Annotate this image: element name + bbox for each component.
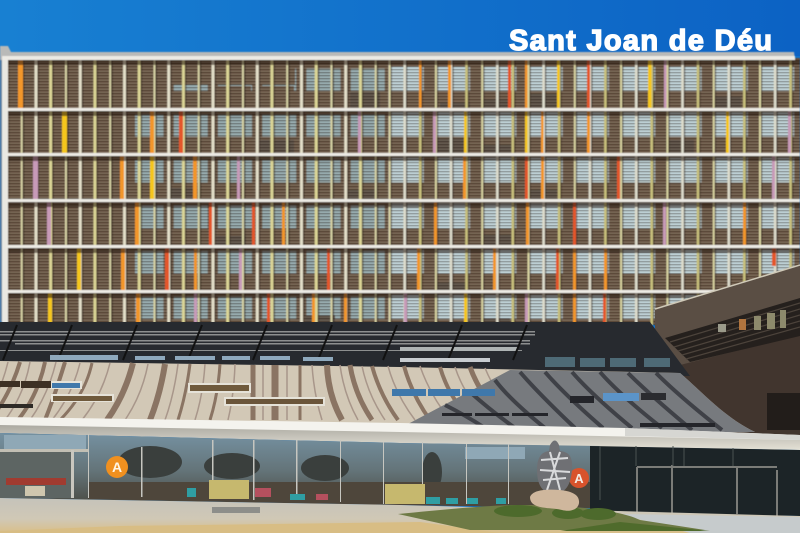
slab shadows: [8, 60, 800, 298]
turquoise furniture: [187, 488, 506, 504]
roof surface: [0, 361, 755, 432]
silver figure: [537, 440, 572, 492]
left entrance door: [0, 449, 88, 498]
pavement: [0, 498, 800, 533]
reflective glass: [0, 433, 600, 508]
pavement grate: [212, 507, 260, 513]
slat overlay: [8, 60, 800, 325]
canopy edge: [0, 417, 800, 440]
shrubs: [494, 505, 616, 520]
dark roof vents: [442, 396, 715, 427]
light rails: [0, 331, 535, 351]
figure highlights: [540, 452, 570, 490]
wing lower dark panel: [767, 393, 800, 430]
band background: [0, 322, 690, 376]
coloured fins floor 6: [48, 293, 606, 325]
right windows: [389, 60, 800, 325]
wing upper cladding: [655, 265, 800, 440]
left tower edge: [2, 56, 8, 324]
unglazed and dark window patches: [135, 60, 295, 108]
wing lower cladding: [680, 335, 800, 440]
curved roof: [0, 361, 755, 432]
facade with louvres and coloured fins: [0, 46, 800, 325]
left windows: [135, 60, 389, 325]
repeating fins left: [9, 58, 389, 325]
right wing of the building: [655, 265, 800, 440]
interior lower band: [88, 482, 590, 508]
dark lobby glass: [590, 446, 800, 516]
sky background: [0, 0, 800, 56]
skylight frames: [50, 381, 325, 406]
wing top edge: [655, 265, 800, 309]
floor slabs: [3, 56, 800, 293]
band glazing: [50, 355, 490, 362]
coloured fins floor 2: [62, 111, 791, 153]
blue skylights: [52, 383, 666, 401]
repeating fins right: [389, 58, 795, 325]
thin roof seams: [0, 362, 520, 420]
rock base: [530, 490, 579, 511]
dark rooms behind glass: [170, 92, 741, 325]
lobby transoms: [600, 446, 733, 500]
roof shadow: [408, 370, 755, 432]
canopy: [0, 417, 800, 450]
roof seams: [0, 362, 505, 420]
dark louvre band above roof: [0, 322, 690, 376]
coloured fins floor 1: [18, 60, 666, 108]
mullions: [88, 434, 509, 504]
shaded seams: [445, 372, 722, 430]
pale sky reflection: [4, 435, 525, 459]
dark lawn edge: [560, 522, 710, 531]
red wayfinding sign A: A: [574, 471, 584, 486]
wing dark louvres: [665, 298, 800, 362]
lobby doors: [637, 465, 777, 516]
parapet: [0, 46, 795, 60]
pink furniture: [255, 488, 328, 500]
wing louvre lines: [670, 303, 800, 359]
coloured fins floor 3: [33, 156, 775, 199]
canopy shaded edge: [625, 428, 800, 440]
canopy underside: [0, 424, 800, 450]
tree reflections: [118, 446, 442, 492]
right walkway: [620, 514, 800, 533]
left blue sliver: [0, 60, 2, 322]
orange wayfinding sign A: A: [112, 459, 122, 475]
skylights: [0, 381, 323, 408]
shaded glazing right: [545, 357, 670, 367]
brown louvre base: [8, 58, 800, 325]
building sign: Sant Joan de Déu: Sant Joan de Déu: [509, 25, 772, 57]
coloured fins floor 5: [77, 248, 776, 290]
wing windows: [718, 310, 786, 332]
struts: [3, 325, 527, 360]
garden bed: [398, 505, 710, 531]
orange wayfinding sign A: [106, 456, 128, 478]
red wayfinding sign A: [569, 468, 589, 488]
pavement tan band: [0, 522, 500, 533]
planters: [209, 480, 425, 504]
glass frontage: [0, 433, 800, 516]
coloured fins floor 4: [47, 202, 746, 245]
sculpture on rock: [530, 440, 579, 511]
